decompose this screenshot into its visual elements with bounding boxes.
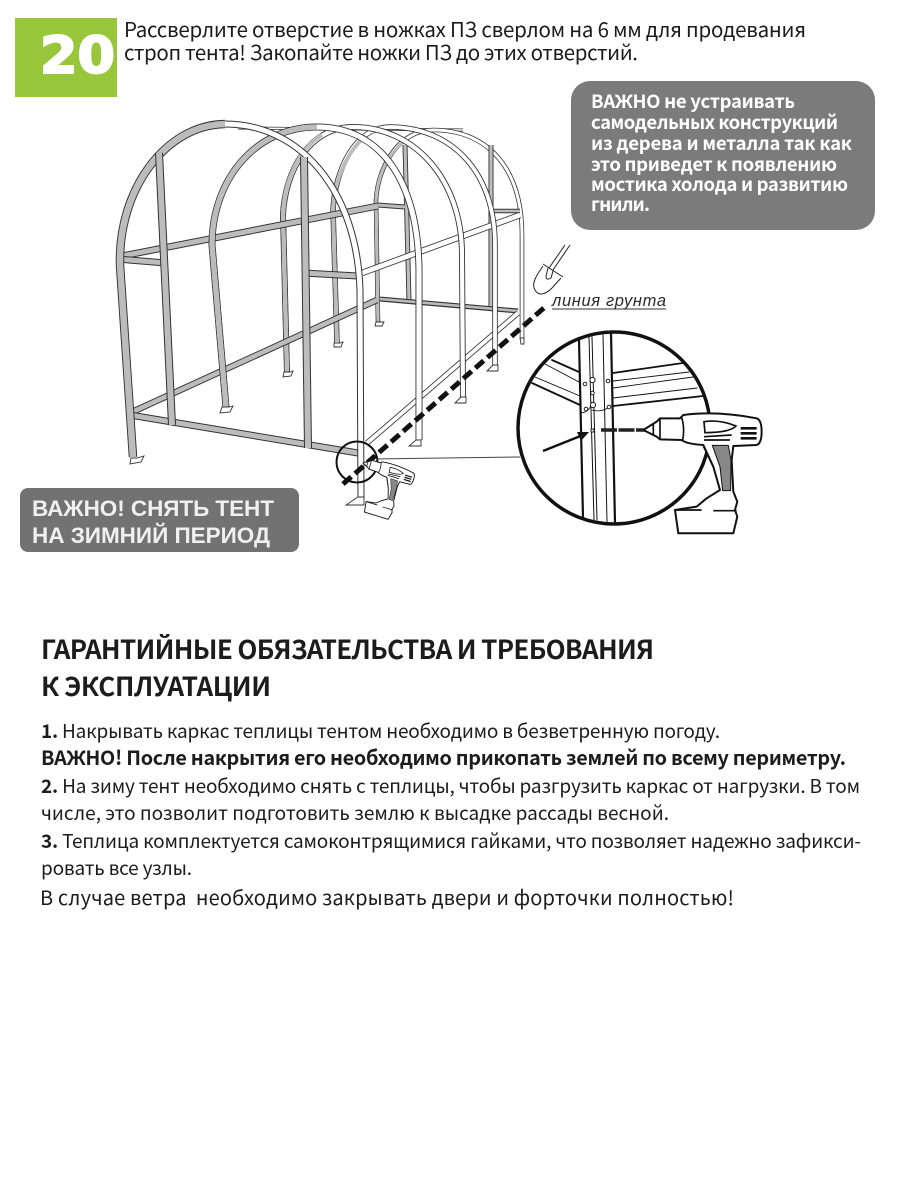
arch 2 xyxy=(212,127,419,440)
crossbars xyxy=(532,360,703,406)
step instruction text: Рассверлите отверстие в ножках ПЗ сверлом на 6 мм для продевания xyxy=(124,13,806,43)
step number badge: 20 xyxy=(40,27,115,86)
leg feet xyxy=(130,322,524,505)
step instruction text xyxy=(124,13,806,66)
rear arch xyxy=(376,130,522,338)
callout: no home-made constructions: самодельных конструкций xyxy=(591,109,838,135)
front arch xyxy=(120,124,361,500)
arch 4 xyxy=(333,127,495,365)
upper right long bar xyxy=(362,215,520,273)
upper left long bar xyxy=(117,206,378,257)
section heading: ГАРАНТИЙНЫЕ ОБЯЗАТЕЛЬСТВА И ТРЕБОВАНИЯ xyxy=(41,630,654,667)
section heading: К ЭКСПЛУАТАЦИИ xyxy=(41,667,271,704)
warranty requirements text: 2. На зиму тент необходимо снять с теплицы, чтобы разгрузить каркас от нагрузки. В том xyxy=(41,772,860,799)
small detail circle with leader line xyxy=(336,442,520,482)
rear verticals and rear frame xyxy=(378,145,520,311)
callout: remove the cover for winter: ВАЖНО! СНЯТЬ ТЕНТ xyxy=(32,496,274,521)
callout: no home-made constructions: это приведет к появлению xyxy=(591,151,837,177)
icon: large drill xyxy=(643,413,762,533)
step instruction text: строп тента! Закопайте ножки ПЗ до этих отверстий. xyxy=(124,36,638,66)
warranty requirements text: ВАЖНО! После накрытия его необходимо прикопать землей по всему периметру. xyxy=(41,742,846,771)
warranty requirements text: числе, это позволит подготовить землю к высадке рассады весной. xyxy=(41,799,669,826)
callout: remove the cover for winter xyxy=(20,488,299,552)
lower left long bar xyxy=(130,300,377,413)
ground line label: линия грунта xyxy=(551,292,666,310)
warranty requirements text: 3. Теплица комплектуется самоконтрящимися гайками, что позволяет надежно зафикси- xyxy=(41,827,861,854)
detail circle: drilling the leg xyxy=(518,332,710,524)
dashed ground line xyxy=(343,307,545,484)
wind warning line: В случае ветра необходимо закрывать двери и форточки полностью! xyxy=(40,882,734,911)
ridge bar xyxy=(238,128,463,130)
warranty requirements text: 1. Накрывать каркас теплицы тентом необходимо в безветренную погоду. xyxy=(41,717,720,744)
icon: small drill xyxy=(349,456,416,523)
greenhouse frame illustration xyxy=(117,124,524,505)
warranty requirements text: ровать все узлы. xyxy=(41,854,192,881)
callout: no home-made constructions: ВАЖНО не устраивать xyxy=(591,88,795,114)
front vertical struts xyxy=(159,153,308,448)
arrow xyxy=(543,432,589,451)
bolts xyxy=(583,377,611,432)
callout: no home-made constructions: мостика холода и развитию xyxy=(591,171,848,197)
warranty requirements text xyxy=(41,717,861,881)
callout: no home-made constructions xyxy=(571,81,875,230)
arch 3 xyxy=(283,127,463,397)
drill bit xyxy=(601,428,645,432)
post xyxy=(579,333,615,523)
step number badge xyxy=(15,18,117,97)
section heading xyxy=(41,630,654,704)
callout: remove the cover for winter: НА ЗИМНИЙ ПЕРИОД xyxy=(32,523,270,548)
callout: no home-made constructions: из дерева и металла так как xyxy=(591,130,852,156)
lower right long bar xyxy=(367,313,518,443)
icon: shovel xyxy=(534,245,570,294)
callout: no home-made constructions: гнили. xyxy=(591,191,650,217)
front cross bars xyxy=(117,259,358,453)
